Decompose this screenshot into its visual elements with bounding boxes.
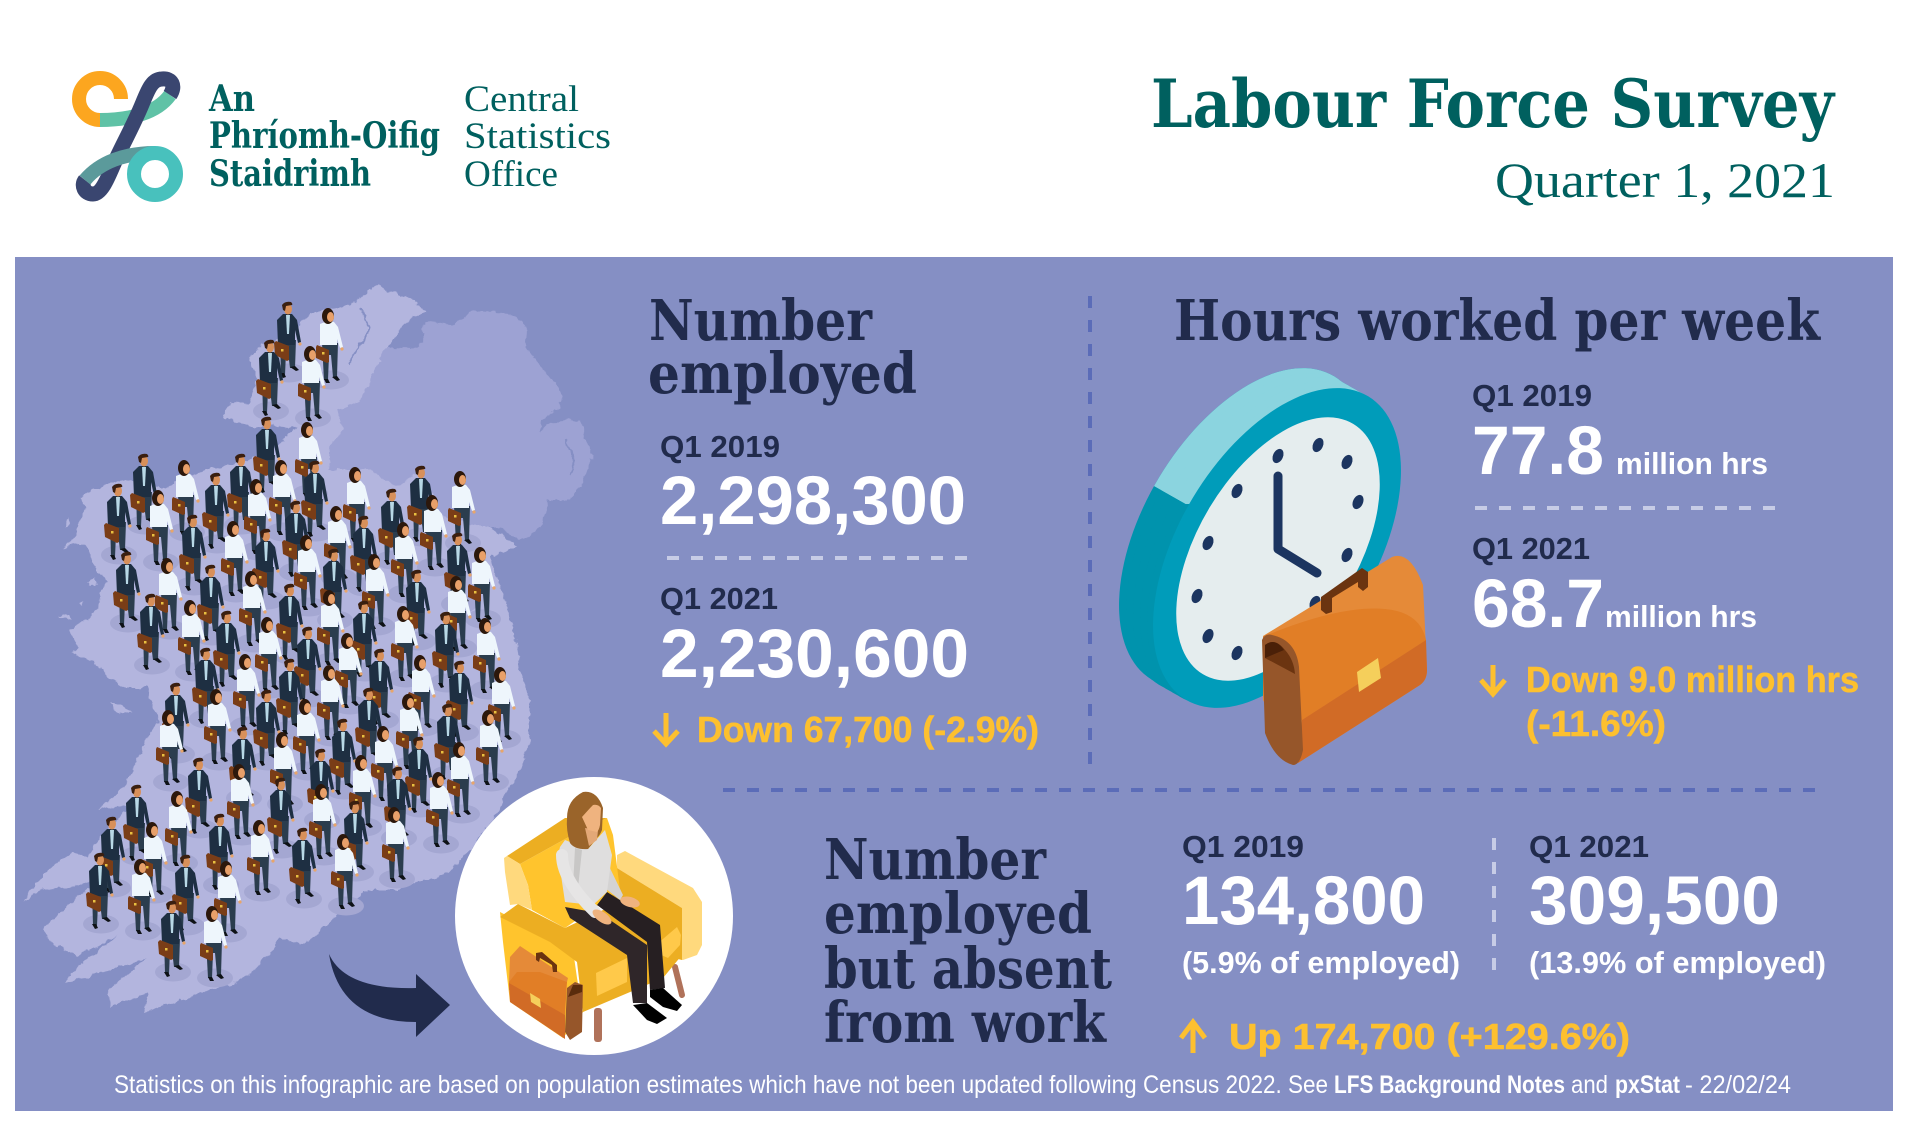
- icon: clock with briefcase: [1119, 368, 1427, 765]
- map: Republic of Ireland: [23, 285, 530, 1012]
- Q1 2019 value: [660, 429, 966, 539]
- Q1 2021 value: (13.9% of employed): [1529, 945, 1826, 980]
- arrow: curved, from map to seated woman: [329, 954, 450, 1037]
- title: Quarter 1, 2021: [1495, 152, 1835, 208]
- map: offshore islands: [58, 517, 132, 713]
- logo Irish name: Phríomh-Oifig: [209, 115, 440, 157]
- heading: but absent: [824, 936, 1112, 1002]
- clock: [1119, 368, 1401, 708]
- change: up: Up 174,700 (+129.6%): [1229, 1016, 1630, 1057]
- title: [1151, 65, 1835, 208]
- seated woman: [558, 792, 682, 1024]
- Q1 2021 value: Q1 2021: [660, 581, 778, 616]
- heading: Number: [649, 288, 873, 354]
- change: down: Down 67,700 (-2.9%): [697, 709, 1039, 750]
- Q1 2021 value: [1529, 829, 1826, 980]
- footnote: and: [1571, 1071, 1608, 1099]
- logo Irish name: [208, 78, 440, 195]
- footnote: pxStat: [1615, 1071, 1681, 1099]
- section: number employed: [648, 288, 1039, 750]
- heading: [648, 288, 917, 407]
- Q1 2019 value: 2,298,300: [660, 462, 966, 539]
- heading: from work: [824, 990, 1107, 1056]
- footnote: Statistics on this infographic are based on population estimates which have not been updated following Census 2022. See: [114, 1071, 1328, 1099]
- logo English name: Central: [464, 79, 579, 120]
- footnote: - 22/02/24: [1685, 1071, 1791, 1099]
- map: lough inlets: [348, 307, 573, 476]
- Q1 2019 value: 134,800: [1182, 862, 1425, 939]
- logo mark: [79, 78, 176, 195]
- logo English name: Office: [464, 154, 558, 195]
- Q1 2019 value: Q1 2019: [660, 429, 780, 464]
- section: number employed but absent from work: [824, 827, 1826, 1057]
- Q1 2019 value: [1182, 829, 1460, 980]
- heading: employed: [648, 341, 917, 407]
- map: Northern Ireland: [327, 310, 592, 540]
- Q1 2019 value: (5.9% of employed): [1182, 945, 1460, 980]
- Q1 2019 value: [1472, 378, 1768, 489]
- heading: Hours worked per week: [1174, 288, 1821, 354]
- map of Ireland with crowd: [23, 285, 592, 1012]
- heading: Number: [824, 827, 1047, 893]
- change: down: [1481, 659, 1859, 744]
- Q1 2019 value: Q1 2019: [1182, 829, 1304, 864]
- panel: main background: [15, 257, 1893, 1111]
- Q1 2019 value: million hrs: [1616, 446, 1768, 481]
- Q1 2021 value: Q1 2021: [1472, 531, 1590, 566]
- Q1 2019 value: Q1 2019: [1472, 378, 1592, 413]
- Q1 2021 value: [660, 581, 969, 692]
- Q1 2021 value: million hrs: [1605, 599, 1757, 634]
- change: down: (-11.6%): [1526, 703, 1666, 744]
- Q1 2021 value: 309,500: [1529, 862, 1780, 939]
- Q1 2019 value: 77.8: [1472, 412, 1604, 489]
- briefcase by chair: [509, 946, 583, 1040]
- logo English name: Statistics: [464, 116, 611, 157]
- heading: employed: [824, 881, 1092, 947]
- change: down: Down 9.0 million hrs: [1526, 659, 1859, 700]
- map: island outline: [23, 285, 592, 1012]
- title: Labour Force Survey: [1151, 65, 1835, 143]
- briefcase: [1262, 556, 1427, 765]
- Q1 2021 value: Q1 2021: [1529, 829, 1649, 864]
- crowd of workers: [83, 302, 521, 988]
- Q1 2021 value: [1472, 531, 1757, 642]
- Q1 2021 value: 2,230,600: [660, 615, 969, 692]
- Q1 2021 value: 68.7: [1472, 565, 1604, 642]
- logo English name: [464, 79, 611, 195]
- section: hours worked per week: [1068, 288, 1859, 765]
- logo Irish name: An: [208, 78, 255, 120]
- armchair: [500, 818, 702, 1042]
- logo Irish name: Staidrimh: [209, 153, 371, 195]
- logo: Central Statistics Office: [79, 78, 611, 195]
- icon: woman seated in armchair: [455, 777, 733, 1055]
- heading: [824, 827, 1112, 1056]
- footnote: LFS Background Notes: [1334, 1071, 1565, 1099]
